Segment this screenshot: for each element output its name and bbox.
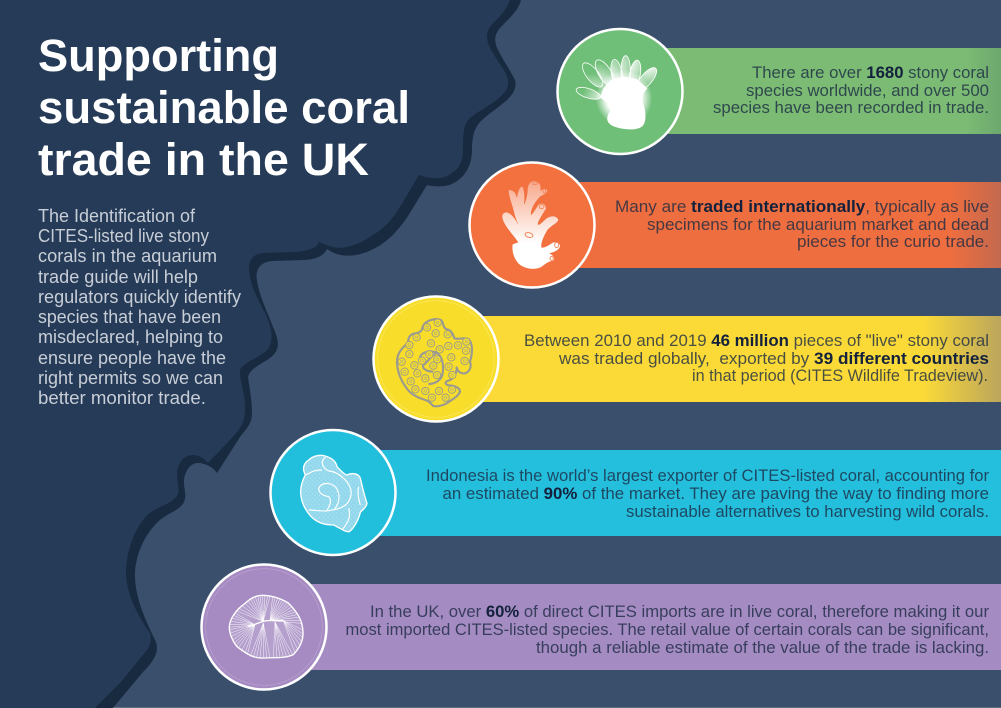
yellow bar text (524, 331, 989, 385)
title: sustainable coral (38, 82, 410, 133)
icon: lobed coral (301, 455, 367, 532)
intro text block (38, 206, 241, 408)
purple bar (310, 584, 1001, 670)
icon: polyp coral (575, 56, 660, 129)
green bar text: species have been recorded in trade. (713, 98, 989, 117)
purple bar text: most imported CITES-listed species. The retail value of certain corals can be significant, (346, 620, 989, 639)
green bar text: There are over 1680 stony coral (752, 63, 989, 82)
blue bar (380, 450, 1001, 536)
purple bar text: though a reliable estimate of the value of the trade is lacking. (536, 638, 989, 657)
icon: polyp colony coral (378, 301, 494, 417)
bottom edge line (113, 707, 1001, 708)
panel: traded internationally (orange) (470, 162, 1001, 288)
green circle (558, 29, 682, 154)
wave edge shadow (0, 0, 521, 708)
green bar (660, 48, 1001, 134)
panel: 46 million pieces (yellow) (374, 296, 1001, 422)
intro text block: The Identification of (38, 206, 196, 226)
intro text block: trade guide will help (38, 267, 198, 287)
yellow bar text: Between 2010 and 2019 46 million pieces of "live" stony coral (524, 331, 989, 350)
yellow bar text: was traded globally, exported by 39 different countries (558, 349, 989, 368)
orange bar text: pieces for the curio trade. (797, 232, 989, 251)
yellow circle (374, 296, 498, 422)
green bar text: species worldwide, and over 500 (746, 81, 989, 100)
intro text block: misdeclared, helping to (38, 327, 223, 347)
intro text block: ensure people have the (38, 348, 226, 368)
purple bar text (346, 602, 989, 657)
yellow bar (480, 316, 1001, 402)
orange bar text (615, 197, 989, 251)
left dark panel (0, 0, 510, 708)
green bar text (713, 63, 989, 117)
title: trade in the UK (38, 134, 370, 185)
yellow bar text: in that period (CITES Wildlife Tradeview). (692, 366, 988, 385)
intro text block: corals in the aquarium (38, 246, 217, 266)
panel: species count (green) (558, 29, 1001, 154)
blue circle (270, 430, 396, 555)
blue bar text: Indonesia is the world’s largest exporter of CITES-listed coral, accounting for (426, 466, 989, 485)
orange bar text: specimens for the aquarium market and dead (647, 215, 989, 234)
blue bar text: an estimated 90% of the market. They are paving the way to finding more (442, 484, 989, 503)
intro text block: right permits so we can (38, 368, 223, 388)
panel: UK imports (purple) (202, 564, 1001, 690)
icon: mushroom coral (206, 569, 322, 685)
title: Supporting (38, 30, 279, 81)
panel: Indonesia exporter (blue) (270, 430, 1001, 555)
blue bar text (426, 466, 989, 521)
intro text block: better monitor trade. (38, 388, 206, 408)
orange circle (470, 162, 594, 288)
title (38, 30, 410, 185)
purple circle (202, 564, 326, 690)
blue bar text: sustainable alternatives to harvesting wild corals. (626, 502, 989, 521)
intro text block: regulators quickly identify (38, 287, 241, 307)
orange bar (575, 182, 1001, 268)
orange bar text: Many are traded internationally, typically as live (615, 197, 989, 216)
intro text block: CITES-listed live stony (38, 226, 209, 246)
purple bar text: In the UK, over 60% of direct CITES imports are in live coral, therefore making it our (370, 602, 989, 621)
icon: branching coral (502, 181, 560, 269)
intro text block: species that have been (38, 307, 221, 327)
